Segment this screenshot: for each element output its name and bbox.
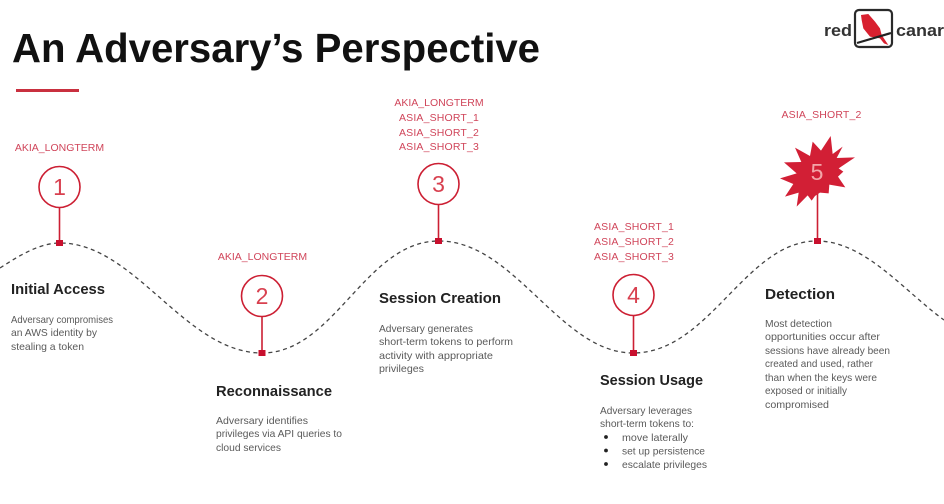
step 1: initial access: AKIA_LONGTERM [15,142,104,154]
step 3: session creation: AKIA_LONGTERM [394,97,484,109]
step 4: session usage [594,221,707,471]
step 5: detection: Most detection [765,319,832,330]
step 3: session creation: Session Creation [379,290,501,307]
step 4: session usage: Adversary leverages [600,406,692,417]
logo: red canary: red [824,21,852,40]
step 4: session usage: ASIA_SHORT_2 [594,236,674,248]
step 1: initial access [11,142,113,353]
step 4: session usage: ASIA_SHORT_3 [594,251,674,263]
step 3: session creation: privileges [379,364,424,375]
title: An Adversary’s Perspective [12,25,540,71]
step 1: initial access: Initial Access [11,281,105,298]
step 1: initial access: an AWS identity by [11,328,98,339]
step 4: session usage: escalate privileges [622,460,707,471]
logo: red canary: canar [896,21,944,40]
dashed wave path [0,241,944,353]
step 5: detection [765,109,890,411]
step 5: detection: than when the keys were [765,373,877,384]
step 2: reconnaissance: AKIA_LONGTERM [218,251,307,263]
step 5: detection: sessions have already been [765,346,890,357]
step 3: session creation [379,97,513,375]
step 5: detection: ASIA_SHORT_2 [781,109,862,121]
step 5: detection: created and used, rather [765,359,874,370]
step 2: reconnaissance: Adversary identifies [216,416,308,427]
step 3: session creation: ASIA_SHORT_1 [399,112,479,124]
step 1: initial access: 1 [53,174,66,200]
step 1: initial access: stealing a token [11,342,84,353]
step 3: session creation: activity with appropriate [379,351,493,362]
step 4: session usage: Session Usage [600,372,703,389]
title underline [16,89,79,92]
step 5: detection: Detection [765,286,835,303]
step 3: session creation: short-term tokens to perform [379,337,513,348]
logo: red canary [824,10,944,47]
step 2: reconnaissance: Reconnaissance [216,383,332,400]
step 3: session creation: ASIA_SHORT_3 [399,141,479,153]
step 2: reconnaissance: cloud services [216,443,281,454]
step 5: detection: opportunities occur after [765,332,881,343]
step 5: detection: exposed or initially [765,386,848,397]
step 2: reconnaissance: 2 [256,283,268,309]
step 4: session usage: set up persistence [622,446,705,458]
step 1: initial access: Adversary compromises [11,315,113,326]
step 4: session usage: 4 [627,282,640,308]
step 5: detection: compromised [765,400,829,411]
step 3: session creation: ASIA_SHORT_2 [399,127,479,139]
step 4: session usage: ASIA_SHORT_1 [594,221,674,233]
step 4: session usage: move laterally [622,433,689,444]
step 5: detection: 5 [811,159,823,185]
step 3: session creation: 3 [432,171,445,197]
step 4: session usage: short-term tokens to: [600,419,694,430]
step 2: reconnaissance: privileges via API queries to [216,429,342,440]
step 2: reconnaissance [216,251,342,454]
step 3: session creation: Adversary generates [379,324,473,335]
icon: explosion burst [780,136,855,207]
